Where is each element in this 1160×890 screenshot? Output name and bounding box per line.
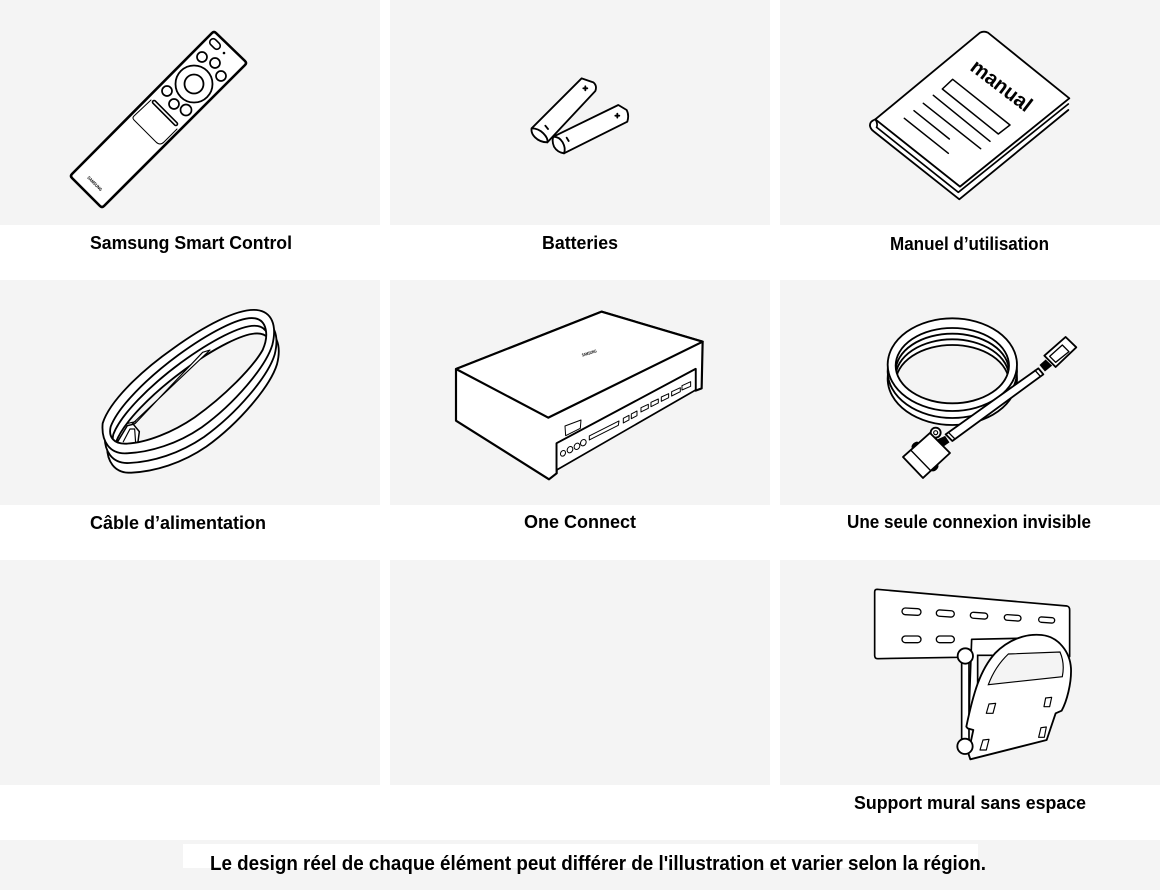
panel background xyxy=(780,0,1160,225)
icon: remote control xyxy=(71,32,246,207)
icon: power cable coil xyxy=(102,310,279,473)
label: Une seule connexion invisible xyxy=(847,512,1091,532)
panel background xyxy=(780,560,1160,785)
panel background xyxy=(0,0,380,225)
panel: One Connect xyxy=(390,280,770,532)
panel background xyxy=(780,280,1160,505)
label: Samsung Smart Control xyxy=(90,233,292,253)
label: Batteries xyxy=(542,233,618,253)
remote wordmark: SAMSUNG xyxy=(86,175,104,192)
manual wordmark: manual xyxy=(966,55,1037,117)
panel background xyxy=(0,280,380,505)
panel background xyxy=(390,0,770,225)
label: Support mural sans espace xyxy=(854,793,1086,813)
icon: optical cable coil xyxy=(888,318,1076,478)
panel: empty centre xyxy=(390,560,770,785)
label: Manuel d’utilisation xyxy=(890,234,1049,254)
box wordmark: SAMSUNG xyxy=(581,348,598,358)
panel: Batteries xyxy=(390,0,770,253)
footer band xyxy=(0,840,1160,890)
icon: batteries xyxy=(531,78,628,153)
panel background xyxy=(390,280,770,505)
panel: Une seule connexion invisible xyxy=(780,280,1160,532)
footer disclaimer xyxy=(0,840,1160,890)
icon: One Connect box xyxy=(456,312,703,479)
footer text: Le design réel de chaque élément peut différer de l'illustration et varier selon la région. xyxy=(210,853,986,875)
panel: empty left xyxy=(0,560,380,785)
label: One Connect xyxy=(524,512,636,532)
label: Câble d’alimentation xyxy=(90,513,266,533)
panel: Câble d'alimentation xyxy=(0,280,380,533)
icon: wall mount xyxy=(875,589,1071,759)
panel: Support mural sans espace xyxy=(780,560,1160,813)
icon: manual booklet xyxy=(870,32,1069,199)
panel: Samsung Smart Control xyxy=(0,0,380,253)
footer highlight xyxy=(183,844,978,868)
panel: Manuel d'utilisation xyxy=(780,0,1160,254)
